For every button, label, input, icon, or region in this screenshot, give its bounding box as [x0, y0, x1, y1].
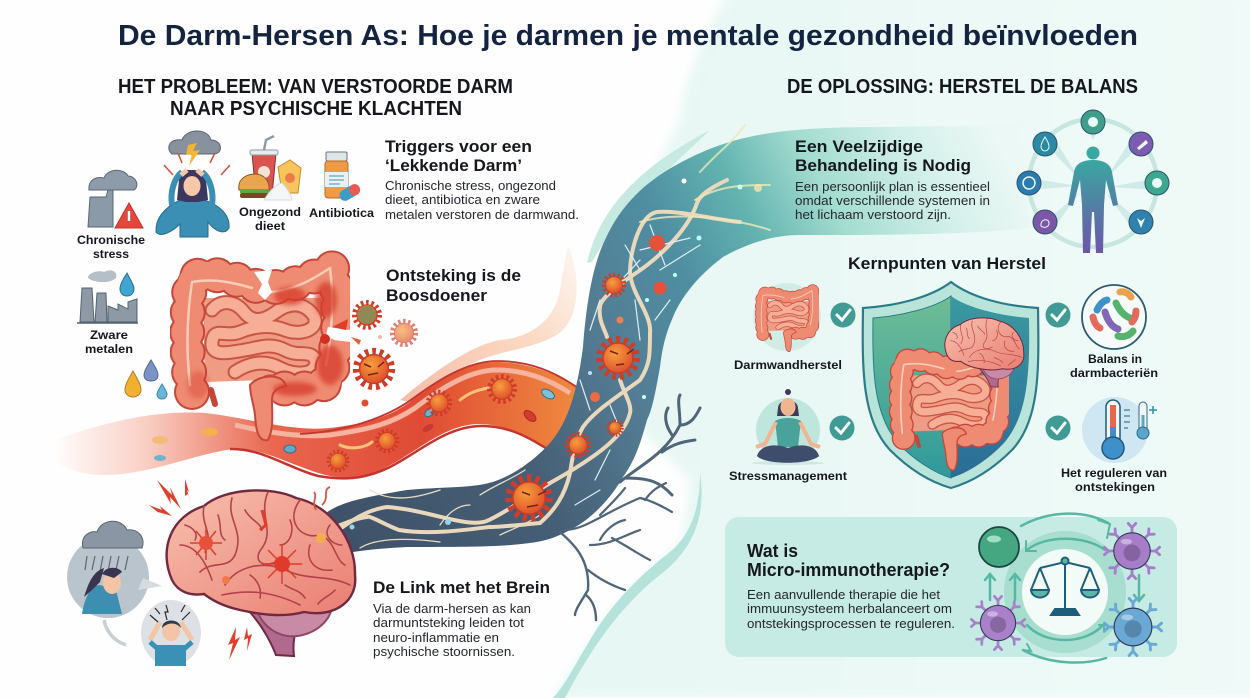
icon: druppels — [125, 360, 167, 399]
cells — [979, 527, 1019, 567]
icon: antibiotica — [325, 152, 362, 203]
text block: triggers: ‘Lekkende Darm’ — [385, 156, 522, 175]
icon: man with headache — [141, 600, 201, 666]
label: balans in darmbacterien — [1070, 352, 1158, 380]
title: De Darm-Hersen As: Hoe je darmen je mentale gezondheid beïnvloeden — [118, 20, 1138, 52]
label: reguleren: ontstekingen — [1075, 480, 1155, 494]
label: zware metalen: Zware — [90, 328, 128, 342]
brain with inflammation — [167, 490, 355, 656]
label: ongezond dieet: Ongezond — [239, 205, 301, 219]
check: bacteria — [1046, 302, 1070, 328]
nerve fibres — [334, 125, 770, 548]
label: chronische stress — [77, 233, 145, 261]
system nodes — [1017, 110, 1169, 234]
text block: ontsteking: Ontsteking is de — [386, 266, 521, 285]
label: chronische stress: stress — [93, 247, 129, 261]
label: balans in darmbacterien: Balans in — [1088, 352, 1142, 366]
blood vessel — [55, 361, 580, 478]
check: stress — [830, 416, 854, 440]
text block: triggers: metalen verstoren de darmwand. — [385, 207, 579, 222]
text block: de link met het brein: neuro-inflammatie en — [373, 630, 499, 645]
text block: wat is micro-immunotherapie — [747, 540, 955, 631]
text block: ontsteking: Boosdoener — [386, 286, 487, 305]
heading: het probleem: NAAR PSYCHISCHE KLACHTEN — [170, 98, 462, 120]
heading: het probleem — [118, 76, 513, 120]
check: inflammation — [1046, 416, 1070, 440]
text block: wat is micro-immunotherapie: Een aanvullende therapie die het — [747, 587, 940, 602]
kernpunt: thermometers — [1082, 397, 1157, 463]
text block: wat is micro-immunotherapie: Wat is — [747, 540, 798, 561]
arrow: between moods — [104, 620, 126, 645]
text block: veelzijdige behandeling: omdat verschillende systemen in — [795, 193, 990, 208]
text block: triggers: Triggers voor een — [385, 137, 532, 156]
label: chronische stress: Chronische — [77, 233, 145, 247]
label: zware metalen: metalen — [85, 342, 133, 356]
kernpunt: darmwandherstel — [734, 283, 856, 372]
text block: veelzijdige behandeling: Behandeling is Nodig — [795, 156, 971, 175]
label: stressmanagement: Stressmanagement — [729, 469, 847, 483]
text block: triggers: dieet, antibiotica en zware — [385, 192, 540, 207]
diagram: body with systems — [1017, 110, 1169, 253]
peach inflammation swoosh — [400, 245, 577, 402]
text block: triggers: Chronische stress, ongezond — [385, 178, 556, 193]
label: ongezond dieet — [239, 205, 301, 233]
text block: triggers — [385, 137, 579, 222]
text block: ontsteking — [386, 266, 521, 305]
text block: de link met het brein: darmuntsteking leiden tot — [373, 615, 524, 630]
nerve roots — [560, 395, 700, 620]
lightning bolts — [149, 479, 252, 660]
label: antibiotica: Antibiotica — [309, 206, 374, 220]
text block: de link met het brein — [373, 578, 550, 659]
text block: wat is micro-immunotherapie: immuunsysteem herbalanceert om — [747, 601, 952, 616]
text block: veelzijdige behandeling: Een persoonlijk plan is essentieel — [795, 179, 990, 194]
icon: zware metalen — [77, 270, 138, 323]
angry faces — [522, 349, 634, 507]
icon: ongezond dieet — [239, 136, 301, 200]
panel: micro-immunotherapie — [725, 514, 1177, 663]
shield — [863, 282, 1038, 488]
blood cells — [152, 387, 556, 461]
text block: wat is micro-immunotherapie: ontstekingsprocessen te reguleren. — [747, 616, 955, 631]
heading: het probleem: HET PROBLEEM: VAN VERSTOORDE DARM — [118, 76, 513, 98]
heading: kernpunten: Kernpunten van Herstel — [848, 254, 1046, 273]
text block: wat is micro-immunotherapie: Micro-immunotherapie? — [747, 559, 950, 580]
intestine — [187, 268, 350, 440]
icon: stressed woman — [156, 131, 230, 237]
text block: de link met het brein: De Link met het Brein — [373, 578, 550, 597]
nerve band — [326, 125, 1030, 553]
text block: veelzijdige behandeling — [795, 137, 990, 222]
icon: chronische stress — [88, 170, 143, 228]
label: balans in darmbacterien: darmbacteriën — [1070, 366, 1158, 380]
heat waves — [314, 487, 330, 510]
label: ongezond dieet: dieet — [255, 219, 285, 233]
diagram: immune balance — [971, 514, 1162, 663]
kernpunt: darmwandherstel: Darmwandherstel — [734, 358, 842, 372]
text block: veelzijdige behandeling: het lichaam verstoord zijn. — [795, 207, 951, 222]
bacteria escaping the gut — [332, 303, 415, 406]
text block: de link met het brein: Via de darm-hersen as kan — [373, 601, 531, 616]
label: reguleren: Het reguleren van — [1061, 466, 1167, 480]
text block: de link met het brein: psychische stoornissen. — [373, 644, 515, 659]
text block: veelzijdige behandeling: Een Veelzijdige — [795, 137, 923, 156]
icon: sad woman — [67, 521, 162, 618]
scales — [1031, 558, 1099, 615]
kernpunt: stressmanagement — [752, 389, 824, 465]
kernpunt: bacterien — [1082, 285, 1146, 349]
label: reguleren — [1061, 466, 1167, 494]
heading: de oplossing: DE OPLOSSING: HERSTEL DE BALANS — [787, 76, 1138, 98]
label: zware metalen — [85, 328, 133, 356]
